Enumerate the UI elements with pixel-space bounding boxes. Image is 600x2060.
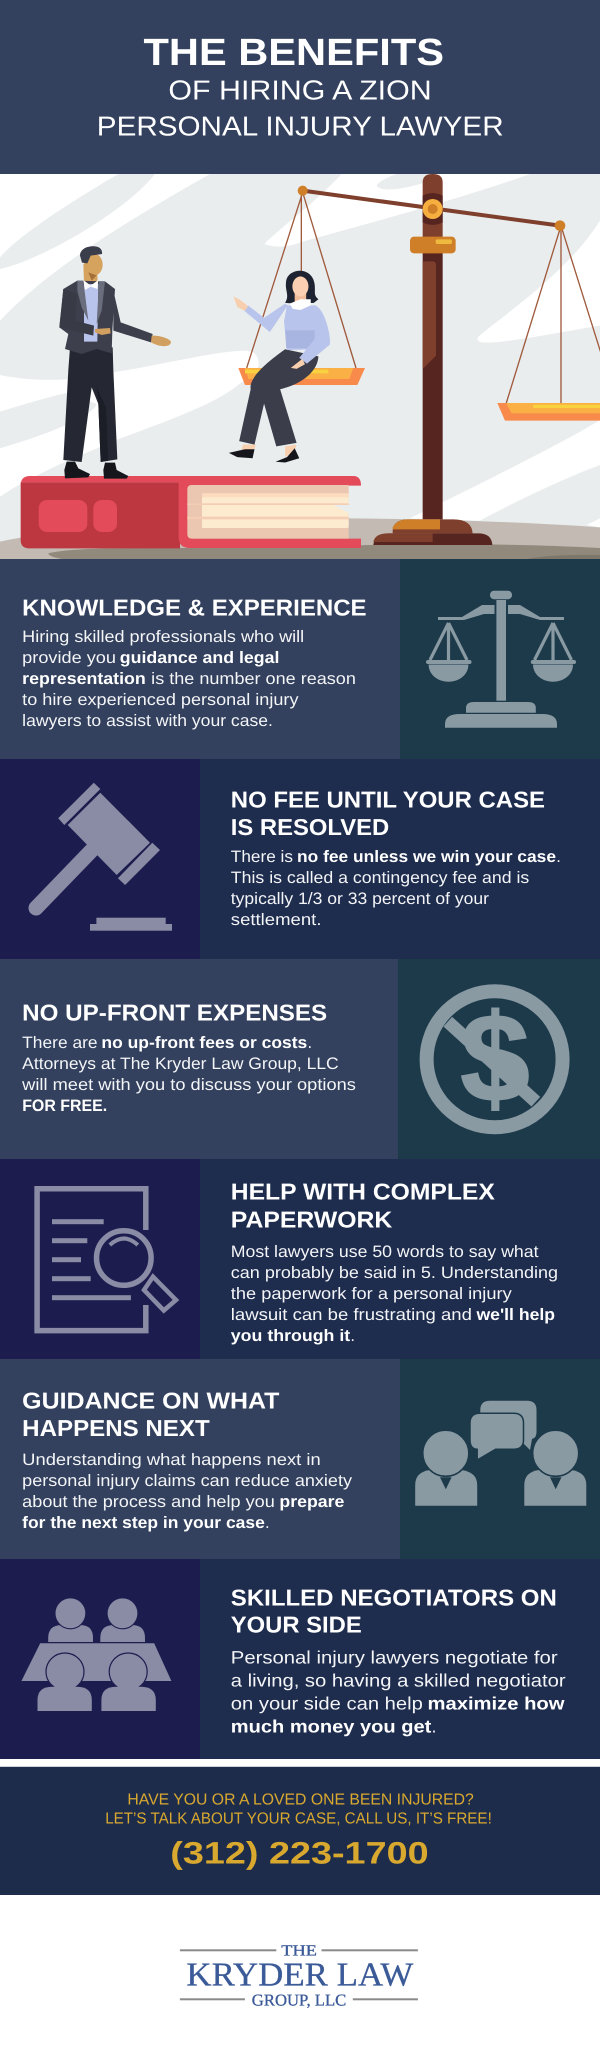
heading — [231, 786, 545, 840]
icon: people at negotiating table — [21, 1598, 171, 1711]
scale column — [423, 174, 443, 519]
panel: guidance on what happens next — [0, 1359, 600, 1559]
prompt line one: HAVE YOU OR A LOVED ONE BEEN INJURED? — [127, 1791, 474, 1808]
body text — [231, 1242, 558, 1345]
body text: typically 1/3 or 33 percent of your — [231, 889, 489, 908]
body text: Most lawyers use 50 words to say what — [231, 1242, 539, 1261]
body text: . — [265, 1513, 270, 1532]
icon: gavel — [36, 783, 172, 931]
body text: for the next step in your case — [22, 1513, 265, 1532]
body text: representation — [22, 669, 146, 688]
hero scene: background, scales, book and standing man — [0, 174, 600, 559]
body text: This is called a contingency fee and is — [231, 868, 529, 887]
subtitle line two: PERSONAL INJURY LAWYER — [97, 111, 504, 142]
icon: crossed-out dollar: $ — [460, 989, 530, 1128]
body text: maximize how — [428, 1694, 566, 1714]
body text: Hiring skilled professionals who will — [22, 627, 304, 646]
body text: will meet with you to discuss your options — [21, 1075, 356, 1094]
body text: lawsuit can be frustrating and — [231, 1305, 472, 1324]
body text: personal injury claims can reduce anxiety — [22, 1471, 353, 1490]
body text — [21, 1033, 356, 1115]
panel: skilled negotiators — [0, 1559, 600, 1759]
body text: no fee unless we win your case — [297, 847, 556, 866]
body text: . — [556, 847, 561, 866]
hero illustration — [0, 174, 600, 560]
heading: GUIDANCE ON WHAT — [22, 1388, 279, 1414]
body text: Understanding what happens next in — [22, 1450, 321, 1469]
body text: we'll help — [475, 1305, 555, 1324]
body text: . — [350, 1326, 355, 1345]
body text: you through it — [231, 1326, 351, 1345]
body text: Personal injury lawyers negotiate for — [231, 1648, 558, 1668]
body text: There is — [231, 847, 293, 866]
logo: The Kryder Law Group: KRYDER LAW — [186, 1957, 414, 1994]
ground — [0, 518, 600, 559]
title: THE BENEFITS — [144, 32, 444, 74]
panel: no up-front expenses — [0, 959, 600, 1159]
heading: NO UP-FRONT EXPENSES — [22, 999, 327, 1025]
panel: no fee until resolved — [0, 759, 600, 959]
body text: about the process and help you — [22, 1492, 275, 1511]
icon: two people talking — [415, 1401, 586, 1506]
body text: settlement. — [231, 910, 322, 929]
body text: the paperwork for a personal injury — [231, 1284, 512, 1303]
logo: The Kryder Law Group: THE — [281, 1943, 317, 1960]
body text: FOR FREE. — [22, 1096, 107, 1115]
scale strings — [247, 192, 600, 404]
heading: HELP WITH COMPLEX — [231, 1179, 495, 1205]
body text: prepare — [279, 1492, 344, 1511]
body text — [231, 847, 561, 929]
body text: . — [432, 1717, 437, 1737]
panel: help with complex paperwork — [0, 1159, 600, 1359]
logo: The Kryder Law Group: GROUP, LLC — [252, 1990, 346, 2009]
body text: much money you get — [231, 1717, 431, 1737]
body text: on your side can help — [231, 1694, 423, 1714]
heading: YOUR SIDE — [231, 1612, 362, 1638]
header banner — [0, 0, 600, 174]
body text: There are — [22, 1033, 98, 1052]
scale base — [373, 519, 492, 545]
panel: knowledge and experience — [0, 559, 600, 759]
heading: PAPERWORK — [231, 1207, 393, 1233]
body text: provide you — [22, 648, 116, 667]
scale beam — [303, 191, 560, 226]
icon: balance scale — [426, 591, 576, 728]
body text: guidance and legal — [120, 648, 279, 667]
icon: crossed-out dollar — [427, 989, 563, 1128]
right scale pan — [497, 403, 600, 421]
body text — [22, 627, 356, 730]
subtitle line one: OF HIRING A ZION — [168, 74, 432, 105]
call to action banner — [0, 1767, 600, 1895]
body text: to hire experienced personal injury — [22, 690, 299, 709]
heading: HAPPENS NEXT — [22, 1415, 210, 1441]
seated woman — [229, 271, 330, 462]
prompt line two: LET’S TALK ABOUT YOUR CASE, CALL US, IT’S FREE! — [105, 1810, 492, 1827]
column clamp — [410, 237, 456, 253]
heading: NO FEE UNTIL YOUR CASE — [231, 786, 545, 812]
heading: KNOWLEDGE & EXPERIENCE — [22, 595, 367, 621]
heading — [231, 1179, 495, 1233]
standing man — [59, 246, 171, 479]
body text: is the number one reason — [151, 669, 356, 688]
heading: SKILLED NEGOTIATORS ON — [231, 1585, 557, 1611]
body text: lawyers to assist with your case. — [22, 711, 273, 730]
icon: document with magnifier — [37, 1189, 176, 1331]
left scale pan — [238, 368, 365, 385]
heading — [22, 1388, 279, 1441]
phone number: (312) 223-1700 — [170, 1835, 429, 1870]
body text: can probably be said in 5. Understanding — [231, 1263, 558, 1282]
scale pivot — [298, 186, 565, 231]
open book — [21, 476, 361, 548]
body text: no up-front fees or costs — [101, 1033, 307, 1052]
body text: . — [308, 1033, 312, 1052]
heading: IS RESOLVED — [231, 814, 389, 840]
body text: a living, so having a skilled negotiator — [231, 1671, 566, 1691]
heading — [231, 1585, 557, 1638]
body text — [231, 1648, 566, 1737]
logo: The Kryder Law Group — [180, 1943, 418, 2009]
body text — [22, 1450, 353, 1532]
body text: Attorneys at The Kryder Law Group, LLC — [22, 1054, 339, 1073]
